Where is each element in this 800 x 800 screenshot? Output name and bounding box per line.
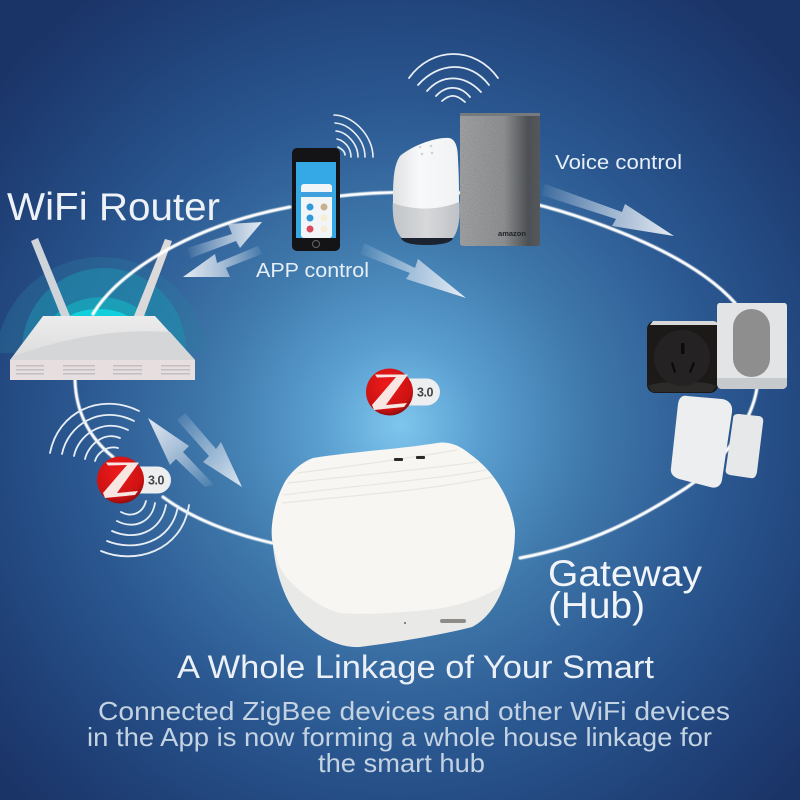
- router wifi glow: [0, 257, 206, 353]
- amazon echo speaker: amazon: [498, 229, 526, 238]
- wifi waves below zigbee badge: [101, 501, 189, 556]
- heading: WiFi Router: WiFi Router: [7, 186, 220, 229]
- gray wireless sensor box: [717, 303, 787, 389]
- router body: [10, 316, 195, 360]
- label: Gateway (Hub): (Hub): [548, 585, 645, 626]
- zigbee hub: [272, 443, 515, 647]
- door sensor main: [671, 396, 732, 488]
- arrows: router and zigbee: [148, 413, 242, 487]
- label: APP control: APP control: [256, 260, 369, 282]
- arrow: speakers down: [360, 243, 466, 298]
- door sensor magnet: [726, 414, 763, 478]
- arrow: voice control: [541, 184, 674, 236]
- description text: Connected ZigBee devices and other WiFi devices: [98, 696, 730, 726]
- arrows: router and phone: [183, 222, 262, 277]
- zigbee badge center: [366, 368, 440, 416]
- phone: [292, 148, 340, 251]
- label: Gateway (Hub): [548, 553, 703, 626]
- amazon echo speaker: [460, 113, 540, 246]
- description text: [87, 696, 730, 778]
- wifi waves near phone: [334, 115, 373, 157]
- smart plug: [647, 321, 718, 393]
- description text: the smart hub: [318, 748, 485, 778]
- wifi waves above speakers: [409, 54, 498, 102]
- description text: in the App is now forming a whole house linkage for: [87, 722, 712, 752]
- connection ring: [75, 192, 757, 558]
- label: Gateway (Hub): Gateway: [548, 553, 703, 594]
- router: [10, 316, 195, 380]
- google home speaker: [393, 138, 460, 245]
- wifi waves above zigbee badge: [50, 404, 139, 461]
- zigbee badge left: [97, 456, 171, 504]
- label: Voice control: Voice control: [555, 152, 682, 174]
- router antennas: [31, 238, 172, 316]
- heading: A Whole Linkage of Your Smart: A Whole Linkage of Your Smart: [177, 649, 654, 685]
